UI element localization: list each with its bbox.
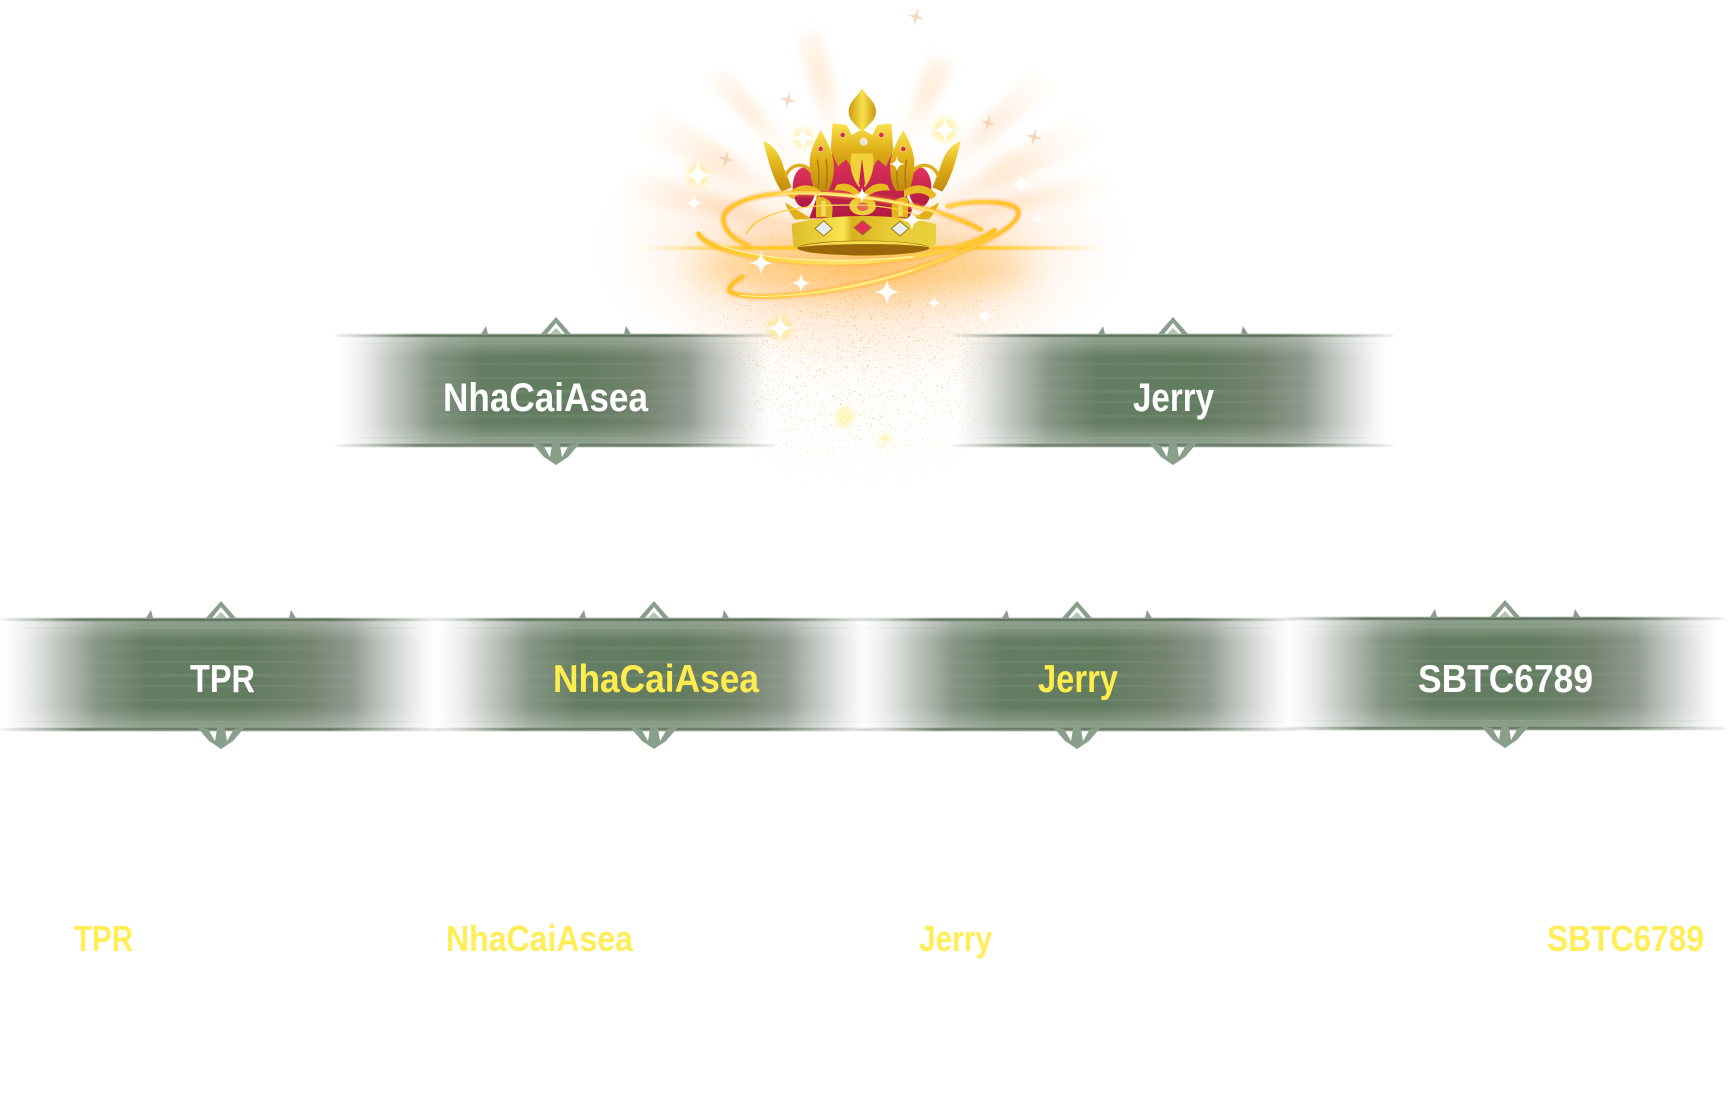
crown left half <box>763 123 862 219</box>
crown glow and rays <box>577 30 1147 400</box>
crown band <box>792 216 936 256</box>
bottom name: Jerry: Jerry <box>919 918 992 959</box>
horizontal flare <box>640 246 1105 250</box>
label: Jerry yellow: Jerry <box>1038 658 1118 701</box>
banner: second row 2 <box>434 601 874 749</box>
banner: top right <box>953 317 1393 465</box>
label: SBTC6789: SBTC6789 <box>1418 658 1593 701</box>
sparkles <box>683 6 1045 446</box>
gold dust particles <box>668 220 1052 495</box>
central jewel and stripe <box>859 158 865 191</box>
banner: top left <box>336 317 776 465</box>
central medallion <box>849 197 876 215</box>
crown <box>698 88 1018 297</box>
label: NhaCaiAsea yellow: NhaCaiAsea <box>553 658 759 701</box>
bottom name: NhaCaiAsea: NhaCaiAsea <box>446 918 634 959</box>
central flame <box>849 88 876 132</box>
crown red base <box>809 150 915 218</box>
band opening <box>797 241 929 255</box>
light rays <box>620 30 1122 240</box>
sparkle halos <box>687 118 957 445</box>
white stars <box>683 117 1045 446</box>
label: TPR: TPR <box>190 658 255 701</box>
banner: second row 3 <box>857 601 1297 749</box>
banner: second row 1 <box>1 601 441 749</box>
label: Jerry top: Jerry <box>1133 376 1215 420</box>
bottom name: SBTC6789: SBTC6789 <box>1547 918 1704 959</box>
orange radial glow <box>577 100 1147 400</box>
band gems <box>815 221 832 236</box>
label: NhaCaiAsea top: NhaCaiAsea <box>443 376 649 420</box>
tan stars <box>715 6 1045 170</box>
banner: second row 4 <box>1285 600 1725 748</box>
swirling rings <box>698 193 1018 297</box>
crown right half <box>862 123 961 219</box>
bottom name: TPR: TPR <box>74 918 133 959</box>
